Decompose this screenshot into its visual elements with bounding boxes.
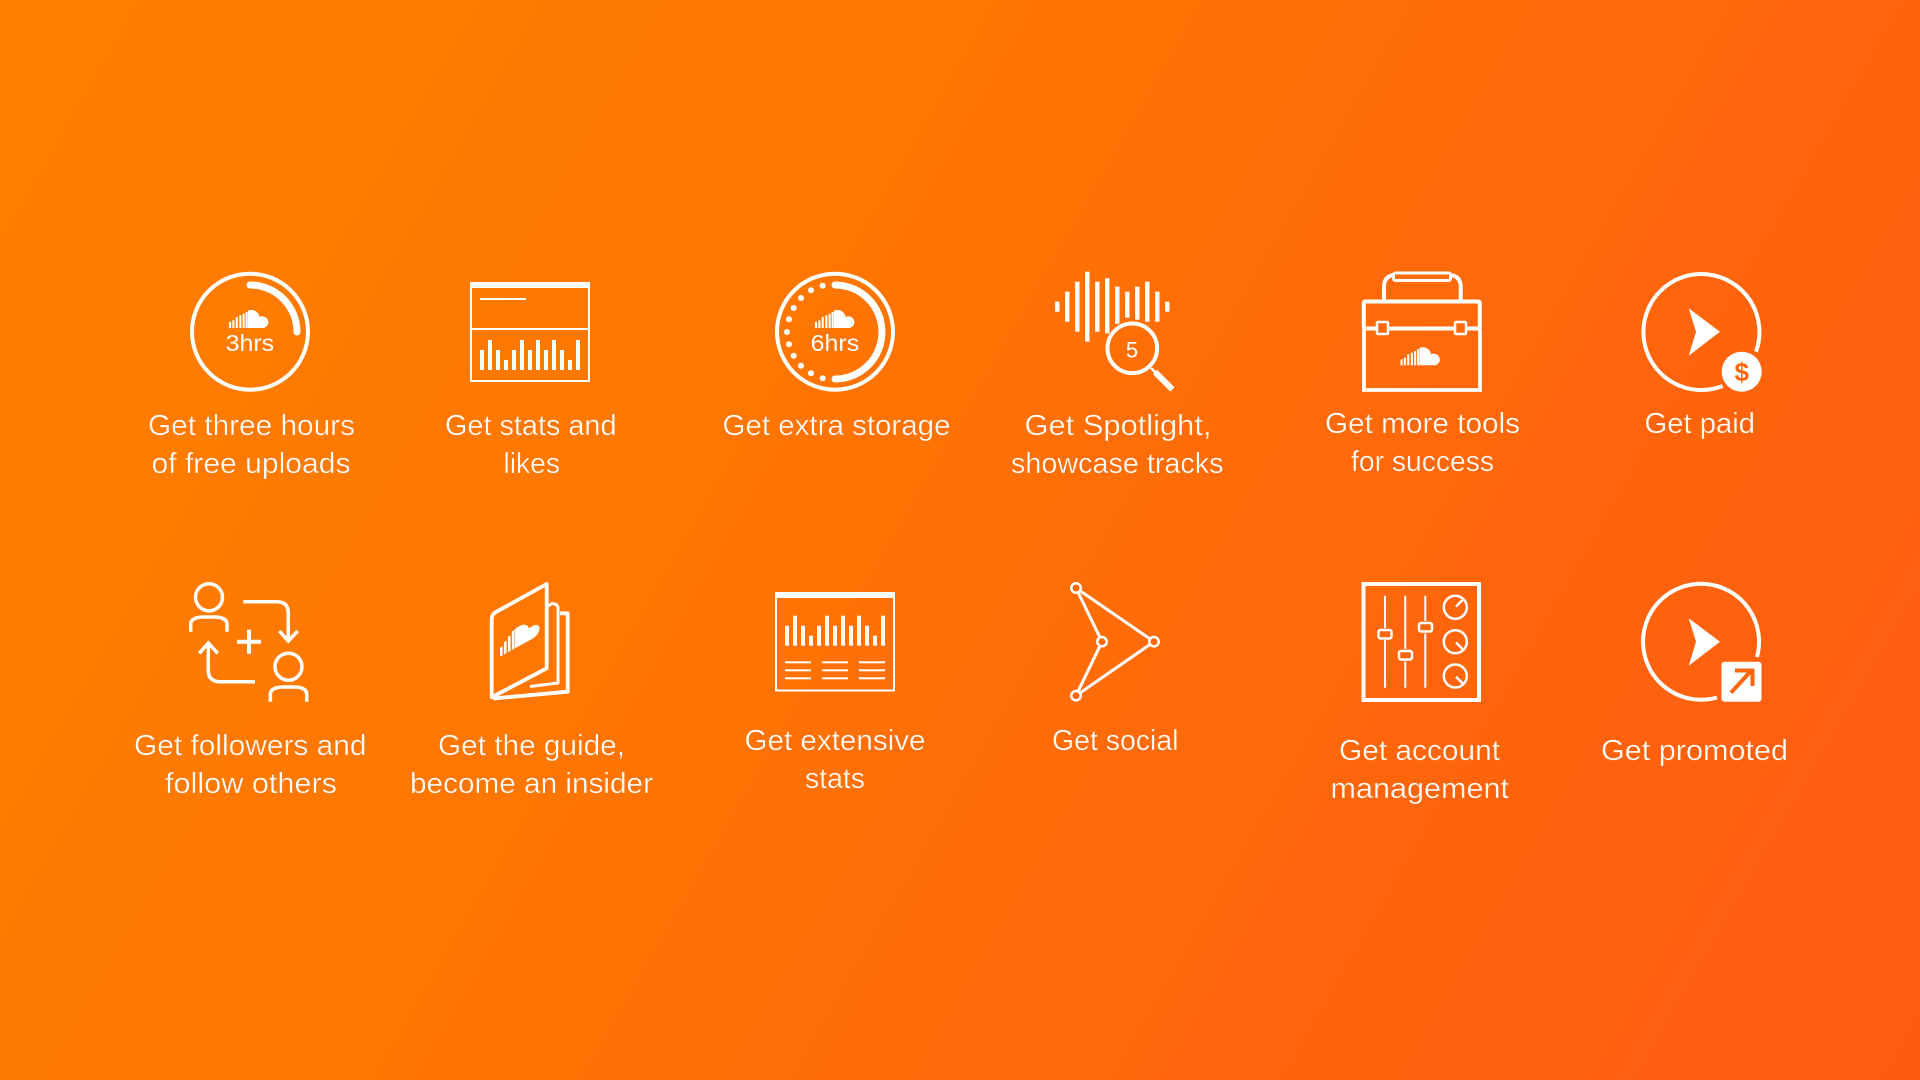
- label: get paid: Get paid: [1644, 408, 1755, 440]
- panel: extensive stats: [744, 592, 926, 795]
- label: stats and likes: likes: [504, 448, 560, 480]
- label: followers: [134, 730, 366, 800]
- icon: play circle with arrow badge: [1643, 584, 1762, 702]
- panel: followers: [134, 584, 366, 800]
- label: three hours of free uploads: of free uploads: [152, 448, 350, 480]
- label: account management: [1330, 735, 1509, 805]
- label: followers: Get followers and: [134, 730, 366, 762]
- label: Spotlight: [1011, 410, 1224, 480]
- icon: toolbox: [1364, 273, 1480, 390]
- panel: get paid: [1643, 274, 1762, 440]
- icon: connected arrow nodes: [1071, 583, 1159, 700]
- icon: 6hrs progress circle: [777, 274, 893, 390]
- icon: 3hrs progress circle: 3hrs: [226, 330, 274, 356]
- icon: open guide book: [492, 584, 568, 698]
- icon: waveform with magnifier: 5: [1126, 338, 1138, 363]
- label: promoted: Get promoted: [1601, 735, 1788, 767]
- label: stats and likes: Get stats and: [445, 410, 616, 442]
- label: extensive stats: stats: [805, 763, 865, 795]
- label: the guide: [410, 730, 653, 800]
- panel: extra storage: [722, 274, 950, 442]
- icon: waveform with magnifier: [1055, 272, 1172, 390]
- panel: the guide: [410, 584, 653, 800]
- icon: play circle with dollar badge: $: [1734, 357, 1749, 387]
- label: the guide: Get the guide,: [438, 730, 625, 762]
- panel: Spotlight: [1011, 272, 1224, 480]
- icon: extended stats window: [775, 592, 895, 690]
- panel: social: [1052, 583, 1178, 757]
- label: Spotlight: Get Spotlight,: [1024, 410, 1212, 442]
- panel: account management: [1330, 584, 1509, 805]
- icon: play circle with dollar badge: [1643, 274, 1762, 392]
- label: extra storage: Get extra storage: [722, 410, 950, 442]
- icon: 6hrs progress circle: 6hrs: [811, 330, 859, 356]
- label: three hours of free uploads: Get three hours: [148, 410, 355, 442]
- label: account management: Get account: [1339, 735, 1500, 767]
- label: Spotlight: showcase tracks: [1011, 448, 1224, 480]
- label: account management: management: [1330, 773, 1509, 805]
- label: more tools: for success: [1351, 446, 1494, 478]
- panel: more tools: [1325, 273, 1520, 478]
- label: extensive stats: Get extensive: [744, 725, 926, 757]
- icon: mixer panel: [1364, 584, 1479, 700]
- label: followers: follow others: [165, 768, 337, 800]
- label: three hours of free uploads: [148, 410, 355, 480]
- label: social: Get social: [1052, 725, 1178, 757]
- icon: two people with arrows: [191, 584, 307, 702]
- icon: 3hrs progress circle: [192, 274, 308, 390]
- panel: three hours of free uploads: [148, 274, 355, 480]
- panel: promoted: [1601, 584, 1788, 767]
- label: extensive stats: [744, 725, 926, 795]
- label: stats and likes: [445, 410, 616, 480]
- label: more tools: [1325, 408, 1520, 478]
- panel: stats and likes: [445, 282, 616, 480]
- label: more tools: Get more tools: [1325, 408, 1520, 440]
- icon: stats window: [470, 282, 590, 381]
- label: the guide: become an insider: [410, 768, 653, 800]
